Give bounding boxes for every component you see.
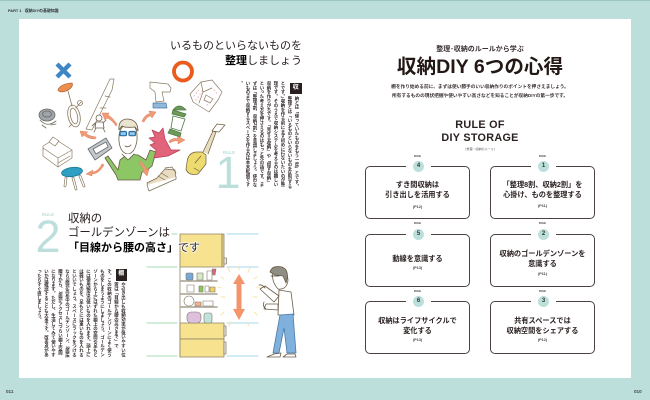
text: RULE (414, 154, 421, 158)
card: rule 2: 収納のゴールデンゾーンを (500, 248, 585, 258)
rule 2 label: RULE (42, 212, 54, 217)
card: rule 2: (P11) (538, 272, 547, 276)
heading: rule 2: ゴールデンゾーンは (68, 227, 170, 239)
heading: rule of DIY storage (441, 118, 519, 144)
illustration: toy figure (92, 115, 106, 132)
intro text: 所有するものの現状把握や使いやすい高さなどを知ることが収納DIYの第一歩です。 (392, 93, 568, 98)
text: RULE (414, 290, 421, 292)
illustration: red monster (149, 128, 180, 158)
card: rule 5 (365, 234, 470, 286)
subheading: right page: 整理･収納のルールから学ぶ (436, 46, 524, 53)
heading: rule of DIY storage: DIY STORAGE (441, 132, 519, 144)
heading: rule 1 (170, 40, 302, 67)
card: rule 6: (P13) (413, 338, 422, 342)
text: rule 2 body, columns beside badge: や引き出しも収納効率が低いやすい位置は「目線から腰の高さまで」で (114, 282, 126, 357)
text: rule 2 body, remaining columns: す。この収納のゴールデンゾーンによく使うものをしまうようにしましょう。ゴールデンゾーンから上にはずれた棚上の空間や足もとには使用頻度の低いものを入れます。頭上には軽いものを、足もとには重いものを入れるといいでしょう。スペースにラックをつけるなら1面が高め中のゴールデンゾーン、2面床腰下から、1面がアクセスしづらい棚上空間になります。ただし、生活してみて使いやすいかは確認することも大事です。改善点があったらすぐ直しましょう。 (38, 269, 112, 357)
text: rule 1 body, columns beside badge: 納とは「使っていたものをもう一度」とです。整理とは「いるものといらないものを区別する」こ (281, 96, 300, 188)
text badge: rule 1: 収 (293, 84, 299, 90)
running header: PART 1 収納DIYの基礎知識 (8, 8, 59, 13)
heading: rule 2: 収納の (68, 212, 102, 224)
card: rule 6: 変化する (403, 326, 432, 334)
illustration: electric guitar (186, 124, 225, 174)
card: rule 1: 心掛け、ものを整理する (503, 190, 582, 199)
illustration: helmet (39, 109, 56, 128)
zone guide lines: green (147, 234, 177, 356)
illustration: fishing rod (86, 79, 114, 130)
card: rule 3 (490, 301, 595, 354)
left page number: 011 (6, 389, 13, 394)
text: rule 1 body, remaining columns: とです。収納を作る前にまず初めに行ないたいのが整理です。そのうえで収納システムを考えるのは難しい収納を作りがちです。「見せる収納」や「隠す収納」といった考え方を押さえるのはもっと先の話です。まずは「整理8割、収納2割」を意識しましょう。使わないものまで収納するスペースを作るのは本末転倒です。 (239, 81, 286, 187)
card: rule 4 (365, 166, 470, 219)
illustration: printer (43, 137, 72, 167)
card: rule 4: 引き出しを活用する (385, 190, 450, 199)
card: rule 5: (P13) (413, 266, 422, 270)
heading: rule 2 (68, 212, 201, 254)
illustration: unicycle (58, 83, 82, 128)
heading: rule 2: 「目線から腰の高さ」です (68, 242, 200, 254)
cabinet (180, 234, 226, 357)
cabinet contents (184, 269, 216, 323)
card: rule 2: 意識する (528, 258, 557, 268)
illustration: shirt (190, 80, 222, 112)
card: rule 6 (365, 301, 470, 354)
text: RULE (539, 222, 546, 225)
top edge line (0, 0, 650, 1)
double-headed height arrow (233, 274, 245, 320)
man in jeans (259, 267, 296, 357)
card: rule 5: 動線を意識する (392, 254, 443, 262)
glow rays (218, 266, 260, 326)
title: right page: 収納DIY 6つの心得 (397, 56, 563, 78)
card: rule 1: 「整理8割、収納2割」を (503, 180, 582, 189)
card: rule 6: 6 (417, 298, 420, 304)
zone guide lines: blue (227, 234, 258, 356)
illustration: power drill (150, 82, 171, 108)
heading: rule 1: いるものといらないものを (170, 40, 302, 52)
text badge: rule 2 (116, 269, 127, 280)
rule 1 numeral: 1 (215, 147, 241, 198)
text: RULE (414, 222, 421, 225)
card: rule 1: (P11) (538, 204, 547, 208)
heading: rule of DIY storage: RULE OF (455, 118, 505, 130)
caption: [ 整理・収納のルール ] (465, 147, 495, 151)
card: rule 2 (490, 234, 595, 286)
intro text (391, 84, 569, 98)
card: rule 1 (490, 166, 595, 219)
card: rule 1: 1 (542, 163, 545, 169)
icon: blue cross (57, 64, 70, 77)
card: rule 6: 収納はライフサイクルで (378, 316, 457, 324)
arrows: from man to objects (80, 111, 185, 176)
illustration: man with glasses (105, 119, 156, 180)
intro text: 棚を作り始める前に、まずは使い勝手のいい収納作りのポイントを押さえましょう。 (391, 84, 569, 89)
illustration: sneakers (147, 167, 176, 191)
card: rule 4: すき間収納は (396, 180, 439, 189)
illustration: lantern (168, 106, 186, 137)
text badge: rule 2: 棚 (118, 271, 124, 277)
card: rule 3: 収納空間をシェアする (507, 326, 578, 334)
card: rule 5: 5 (417, 230, 420, 236)
text: RULE (539, 154, 546, 158)
illustration: stool (61, 166, 84, 189)
rule 1 label: RULE (223, 150, 235, 155)
card: rule 4: (P12) (413, 205, 422, 209)
card: rule 4: 4 (417, 163, 420, 169)
icon: orange circle (174, 62, 192, 80)
card: rule 2: 2 (542, 230, 545, 236)
illustration: cassette tape (88, 138, 112, 160)
card: rule 3: 共有スペースでは (514, 316, 571, 324)
text: RULE (539, 290, 546, 292)
card: rule 3: 3 (542, 298, 545, 304)
right page number: 010 (634, 389, 642, 394)
card: rule 3: (P12) (538, 338, 547, 342)
rule 2 numeral: 2 (35, 210, 61, 262)
heading: rule 1: 整理しましょう (225, 55, 302, 67)
text badge: rule 1 (290, 82, 302, 94)
